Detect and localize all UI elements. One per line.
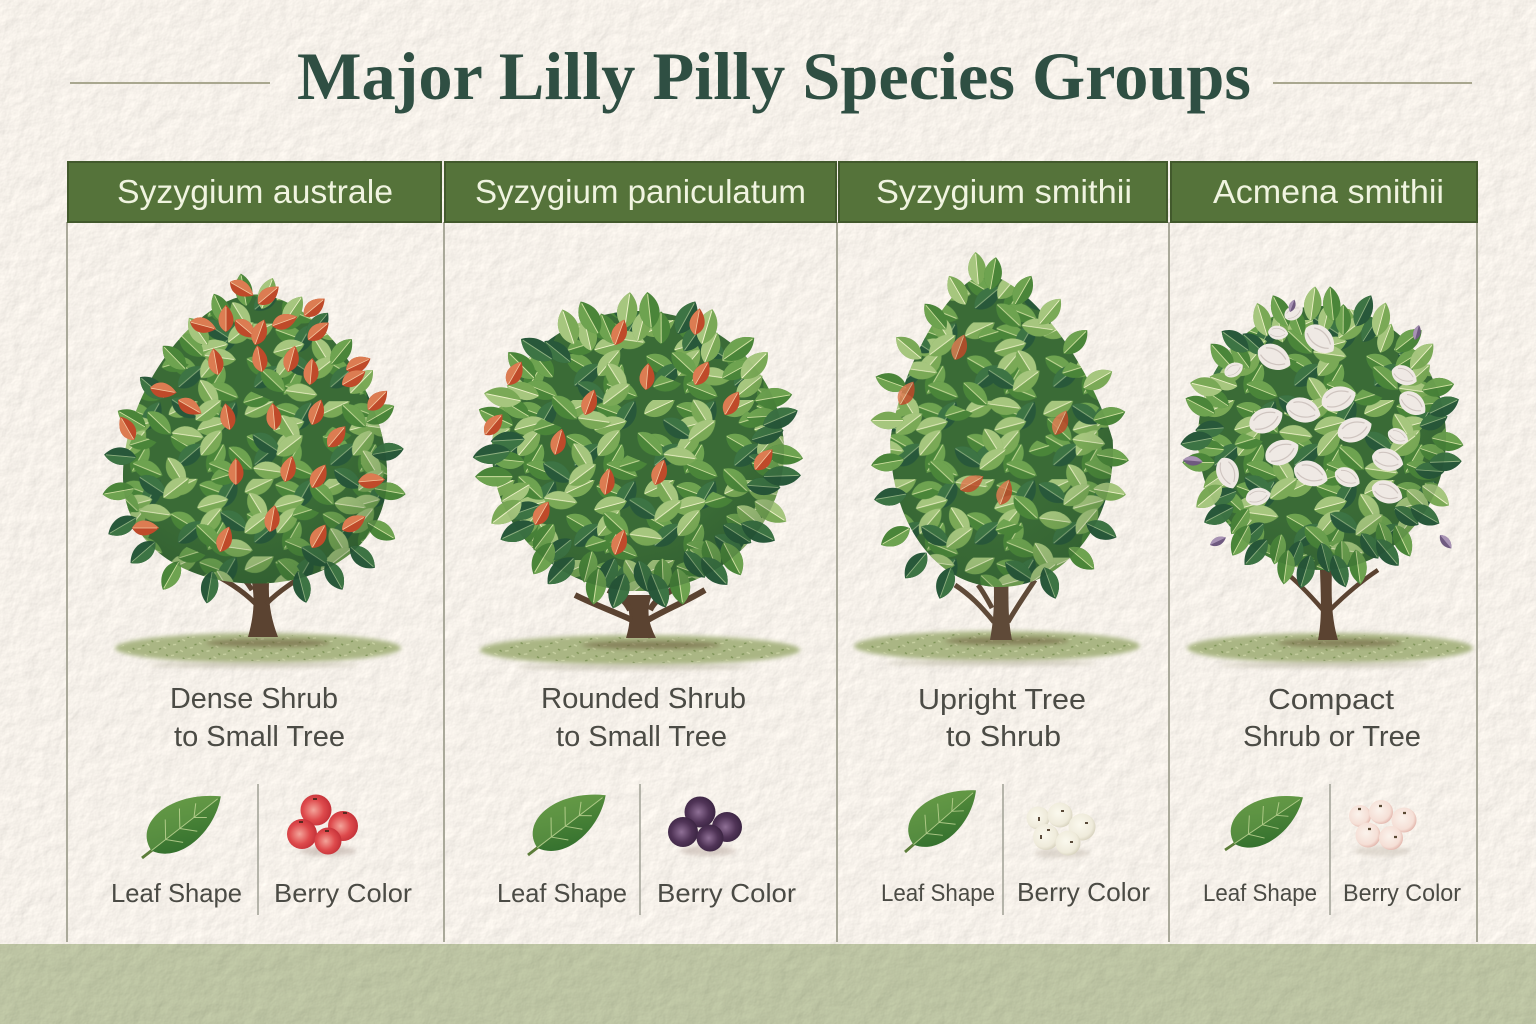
panel: Syzygium australe [67, 162, 444, 942]
icon: leaf shape [1203, 778, 1317, 907]
heading: Syzygium paniculatum [445, 162, 836, 222]
habit description [1243, 684, 1421, 753]
habit description [918, 684, 1086, 753]
panel: Syzygium paniculatum [445, 162, 837, 942]
heading: Acmena smithii [1171, 162, 1477, 222]
icon: leaf shape: Leaf Shape [1203, 880, 1317, 907]
icon: cream berries [1017, 802, 1150, 907]
icon: red berries: Berry Color [274, 878, 412, 908]
icon: red berries [274, 794, 412, 908]
icon: purple berries [657, 796, 796, 908]
icon: leaf shape: Leaf Shape [881, 880, 995, 907]
illustration: upright tree [854, 251, 1140, 666]
habit description [541, 683, 746, 753]
heading: Syzygium australe [68, 162, 441, 222]
panel: Acmena smithii [1171, 162, 1477, 942]
habit description [170, 683, 345, 753]
illustration: compact tree with white buds [1179, 285, 1473, 668]
habit description: Upright Tree [918, 684, 1086, 716]
habit description: to Small Tree [174, 721, 345, 753]
title: Major Lilly Pilly Species Groups [297, 38, 1251, 114]
habit description: Rounded Shrub [541, 683, 746, 715]
habit description: Dense Shrub [170, 683, 338, 715]
heading: Syzygium smithii: Syzygium smithii [876, 173, 1132, 210]
habit description: to Shrub [946, 721, 1061, 753]
illustration: rounded shrub tree [471, 291, 805, 670]
habit description: Shrub or Tree [1243, 721, 1421, 753]
icon: leaf shape: Leaf Shape [111, 878, 242, 908]
illustration: dense shrub tree [101, 272, 407, 668]
icon: leaf shape: Leaf Shape [497, 878, 627, 908]
icon: purple berries: Berry Color [657, 878, 796, 908]
heading: Syzygium australe: Syzygium australe [117, 173, 393, 210]
icon: leaf shape [497, 775, 627, 908]
icon: leaf shape [111, 776, 242, 908]
icon: pale pink berries [1343, 800, 1461, 907]
habit description: to Small Tree [556, 721, 727, 753]
panel: Syzygium smithii [839, 162, 1169, 942]
bottom green band [0, 944, 1536, 1024]
heading: Syzygium paniculatum: Syzygium paniculatum [475, 173, 806, 210]
habit description: Compact [1268, 684, 1394, 716]
icon: leaf shape [881, 772, 995, 907]
heading: Acmena smithii: Acmena smithii [1213, 173, 1444, 210]
heading: Syzygium smithii [839, 162, 1167, 222]
icon: cream berries: Berry Color [1017, 877, 1150, 907]
icon: pale pink berries: Berry Color [1343, 880, 1461, 907]
